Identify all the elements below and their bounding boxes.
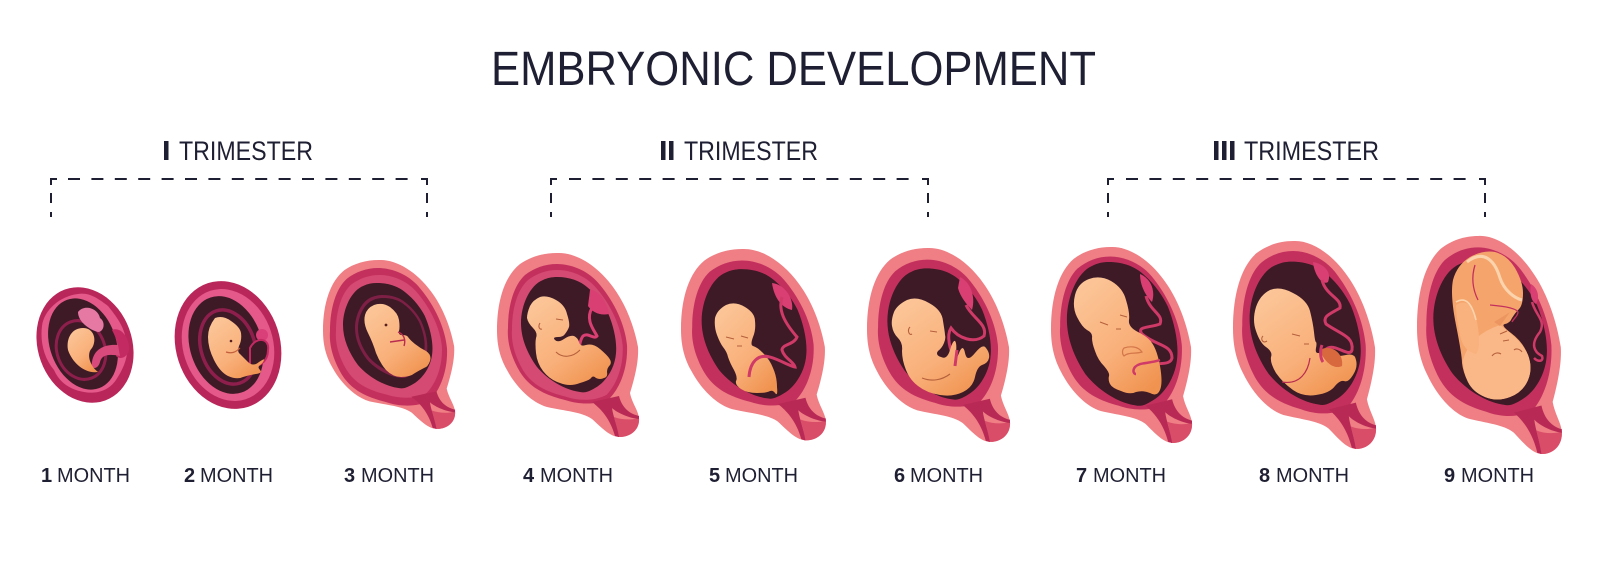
uterus wall <box>1051 247 1192 443</box>
bracket: first trimester <box>51 179 427 217</box>
placenta and cord <box>949 277 985 360</box>
label: 5 month: MONTH <box>725 465 798 487</box>
fetus <box>527 296 611 385</box>
label: 7 month: 7 <box>1076 465 1087 487</box>
title: EMBRYONIC DEVELOPMENT <box>491 43 1096 96</box>
label: 1 month: 1 <box>41 465 52 487</box>
label: 6 month: 6 <box>894 465 905 487</box>
illustration: month 3 <box>323 260 455 429</box>
bracket: third trimester <box>1108 179 1485 217</box>
bracket: second trimester <box>551 179 928 217</box>
illustration: month 6 <box>867 248 1010 442</box>
heading: third trimester: TRIMESTER <box>1244 136 1379 166</box>
illustration: month 9 <box>1417 236 1562 454</box>
placenta and cord <box>579 290 609 348</box>
label: 7 month: MONTH <box>1093 465 1166 487</box>
fetus <box>892 299 989 396</box>
illustration: month 4 <box>497 253 639 437</box>
illustration: month 1 <box>21 273 149 417</box>
label: 1 month: MONTH <box>57 465 130 487</box>
label: 4 month: MONTH <box>540 465 613 487</box>
illustration: month 7 <box>1051 247 1192 443</box>
fetus <box>1452 252 1530 400</box>
fetus <box>1074 277 1162 394</box>
label: 8 month: MONTH <box>1276 465 1349 487</box>
heading: second trimester: TRIMESTER <box>684 136 818 166</box>
heading: first trimester: TRIMESTER <box>179 136 313 166</box>
label: 9 month: 9 <box>1444 465 1455 487</box>
uterus wall <box>1417 236 1562 454</box>
illustration: month 5 <box>681 249 826 440</box>
label: 5 month: 5 <box>709 465 720 487</box>
fetus <box>1254 289 1357 395</box>
uterus wall <box>681 249 826 440</box>
fetus <box>715 303 777 394</box>
illustration: month 8 <box>1233 241 1376 449</box>
placenta and cord <box>750 283 797 377</box>
label: 4 month: 4 <box>523 465 535 487</box>
label: 3 month: 3 <box>344 465 355 487</box>
placenta and cord <box>1531 284 1542 361</box>
uterus wall <box>497 253 639 437</box>
placenta and cord <box>1137 274 1172 366</box>
label: 2 month: 2 <box>184 465 195 487</box>
label: 2 month: MONTH <box>200 465 273 487</box>
label: 8 month: 8 <box>1259 465 1270 487</box>
illustration: month 2 <box>158 267 298 423</box>
uterus wall <box>1233 241 1376 449</box>
placenta and cord <box>1313 262 1352 362</box>
label: 3 month: MONTH <box>361 465 434 487</box>
uterus wall <box>867 248 1010 442</box>
label: 6 month: MONTH <box>910 465 983 487</box>
label: 9 month: MONTH <box>1461 465 1534 487</box>
